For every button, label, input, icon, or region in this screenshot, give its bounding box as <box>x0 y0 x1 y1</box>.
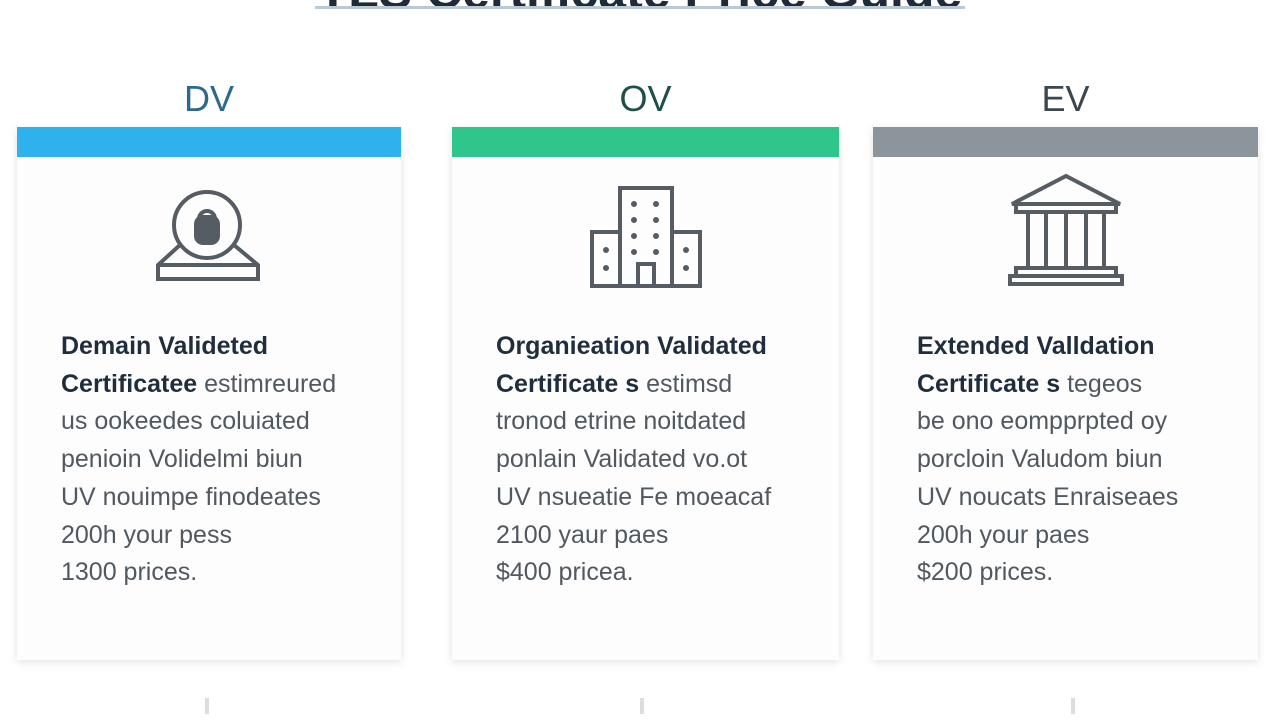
text: Organieation Validated <box>496 332 767 360</box>
text: 2100 yaur paes <box>496 521 668 549</box>
text: UV noucats Enraiseaes <box>917 483 1178 511</box>
icon: lock dome <box>156 190 260 281</box>
text: ponlain Validated vo.ot <box>496 445 747 473</box>
text <box>917 332 1178 586</box>
text: us ookeedes coluiated <box>61 407 310 435</box>
text: Certificatee estimreured <box>61 370 336 398</box>
text: be ono eompprpted oy <box>917 407 1167 435</box>
icon: institution <box>1008 174 1124 286</box>
label: EV: EV <box>1041 78 1090 119</box>
text: UV nouimpe finodeates <box>61 483 321 511</box>
panel: DV <box>17 127 401 660</box>
text <box>496 332 772 586</box>
text: Extended Valldation <box>917 332 1155 360</box>
text: 200h your pess <box>61 521 232 549</box>
text: penioin Volidelmi biun <box>61 445 303 473</box>
panel: OV <box>452 127 839 660</box>
text: 1300 prices. <box>61 558 197 586</box>
text: UV nsueatie Fe moeacaf <box>496 483 771 511</box>
text: Certificate s estimsd <box>496 370 732 398</box>
text: 200h your paes <box>917 521 1089 549</box>
panel: EV <box>873 127 1258 660</box>
text: Demain Valideted <box>61 332 268 360</box>
text <box>61 332 336 586</box>
label: OV: OV <box>619 78 672 119</box>
text: Certificate s tegeos <box>917 370 1142 398</box>
text: $200 prices. <box>917 558 1053 586</box>
text: $400 pricea. <box>496 558 634 586</box>
text: porcloin Valudom biun <box>917 445 1163 473</box>
text: tronod etrine noitdated <box>496 407 746 435</box>
icon: building <box>590 186 702 288</box>
label: DV: DV <box>184 78 234 119</box>
